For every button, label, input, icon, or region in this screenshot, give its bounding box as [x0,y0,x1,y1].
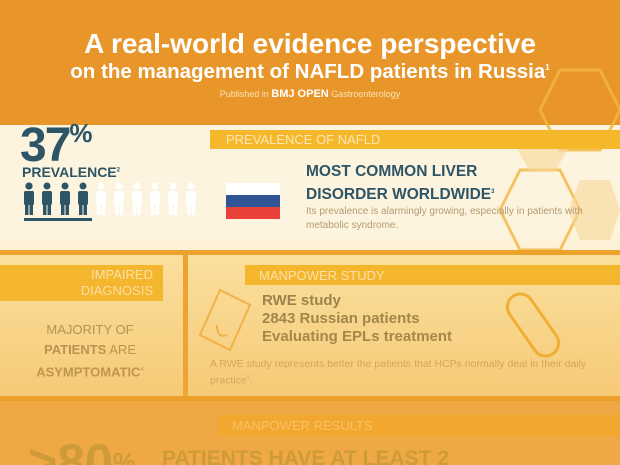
study details [262,292,452,345]
results section [0,401,620,465]
description: Its prevalence is alarmingly growing, especially in patients with metabolic syndrome. [306,206,583,231]
asymptomatic text: ASYMPTOMATIC4 [36,364,144,379]
divider line [0,250,620,255]
most common heading [306,163,494,203]
study details: RWE study [262,292,341,309]
manpower results bar [218,415,620,436]
fade overlay [0,230,620,400]
prevalence of NAFLD bar [210,130,620,149]
impaired diagnosis label [0,265,163,301]
manpower study bar: MANPOWER STUDY [259,268,385,283]
divider line 2 [0,396,620,401]
published line: Published in BMJ OPEN Gastroenterology [220,88,400,100]
study details: 2843 Russian patients [262,310,420,327]
37% number: 37% [20,118,91,172]
impaired diagnosis label: DIAGNOSIS [81,283,153,298]
most common heading: MOST COMMON LIVER [306,163,477,180]
subtitle: on the management of NAFLD patients in Russia1 [70,60,550,83]
middle section background [0,255,620,398]
asymptomatic text [36,322,144,379]
impaired diagnosis label: IMPAIRED [91,267,153,282]
icon: pill [506,292,560,358]
vertical divider [183,255,188,398]
header band [0,0,620,125]
prevalence stat [20,118,196,221]
study details: Evaluating EPLs treatment [262,328,452,345]
manpower study bar [245,265,620,285]
icon: clipboard [198,288,252,352]
asymptomatic text: PATIENTS ARE [44,342,136,357]
most common heading: DISORDER WORLDWIDE3 [306,186,494,203]
prevalence of NAFLD bar: PREVALENCE OF NAFLD [226,132,380,147]
prevalence label: PREVALENCE2 [22,164,120,180]
asymptomatic text: MAJORITY OF [46,322,134,337]
RWE description: A RWE study represents better the patients that HCPs normally deal in their daily practice5. [210,358,586,386]
russian flag [226,183,280,219]
title: A real-world evidence perspective [84,28,536,59]
manpower results bar: MANPOWER RESULTS [232,418,373,433]
people icons [24,182,196,221]
